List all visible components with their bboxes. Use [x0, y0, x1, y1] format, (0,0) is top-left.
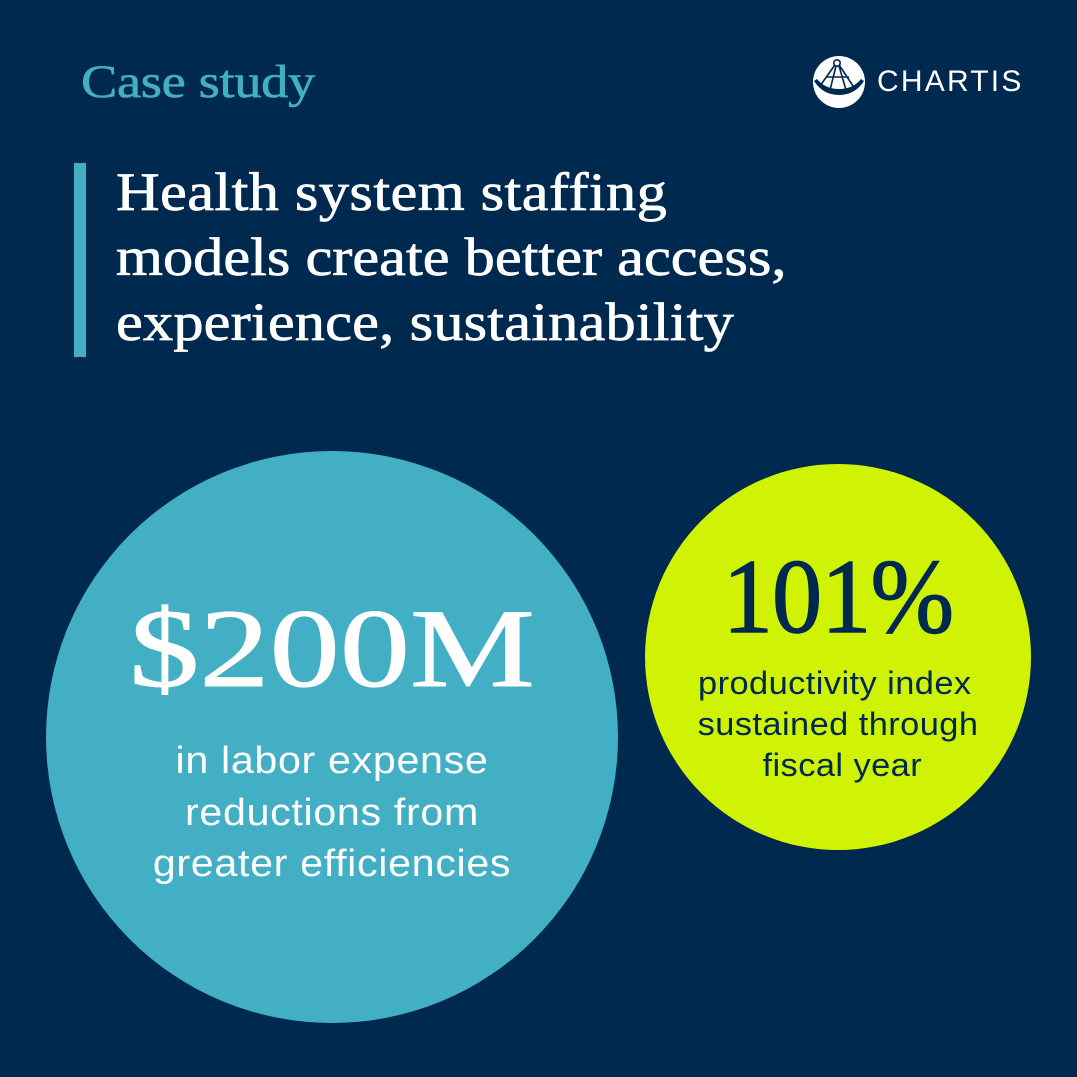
- accent bar: [74, 163, 86, 357]
- icon: chartis logo: [813, 56, 865, 108]
- panel: labor expense circle: [46, 451, 618, 1023]
- title: experience, sustainability: [116, 292, 734, 352]
- description: productivity: sustained through: [698, 706, 978, 742]
- title: models create better access,: [116, 227, 786, 287]
- description: productivity: [698, 665, 978, 783]
- description: productivity: fiscal year: [762, 747, 922, 783]
- title: Health system staffing: [116, 162, 667, 222]
- panel: productivity circle: [645, 464, 1031, 850]
- title: [116, 162, 786, 352]
- description: labor expense: reductions from: [185, 792, 479, 834]
- stat: $200M: $200M: [129, 587, 535, 711]
- description: labor expense: greater efficiencies: [153, 843, 511, 885]
- description: labor expense: in labor expense: [176, 740, 488, 782]
- stat: 101%: 101%: [723, 538, 953, 655]
- logo wordmark: CHARTIS: [877, 65, 1024, 98]
- description: productivity: productivity index: [698, 665, 972, 701]
- heading: case study: Case study: [81, 56, 315, 108]
- description: labor expense: [153, 740, 511, 885]
